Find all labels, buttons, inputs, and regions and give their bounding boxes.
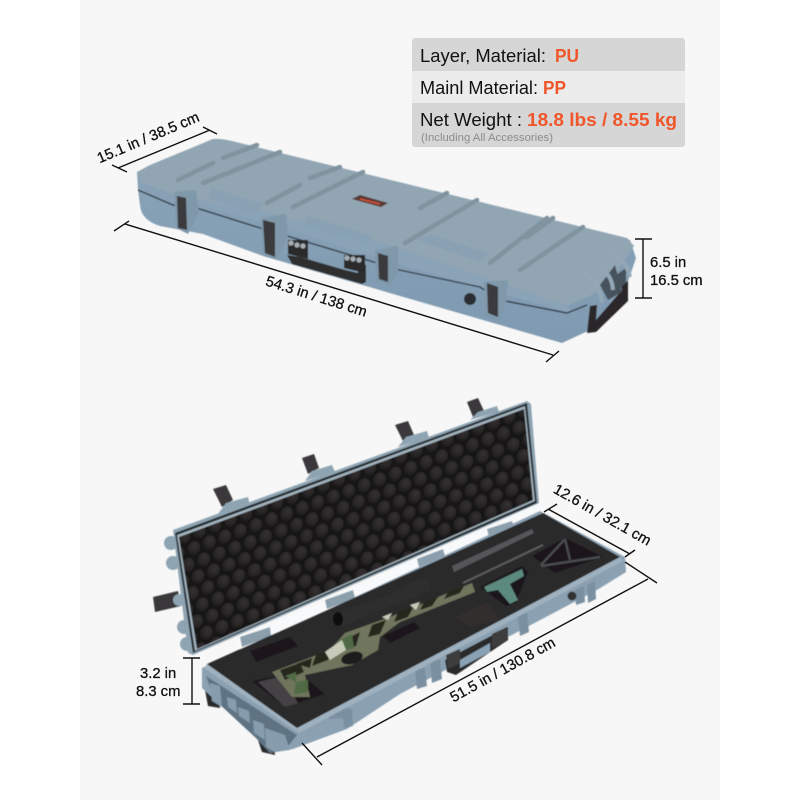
- lid grooves: [178, 145, 583, 270]
- ribs: [210, 683, 290, 752]
- rifle scope: [334, 577, 431, 627]
- handle and knob: [445, 627, 508, 675]
- front handle: [287, 240, 366, 284]
- dimension: case height: 6.5 in: [650, 255, 686, 271]
- dimension: inner depth: [136, 658, 200, 704]
- left side shadow: [206, 676, 297, 753]
- dimension: case height: [635, 239, 703, 298]
- case body: [137, 139, 636, 343]
- dimension: inner depth: 8.3 cm: [136, 684, 180, 700]
- dimension: case length: 54.3 in / 138 cm: [264, 274, 369, 321]
- open base: [202, 505, 626, 755]
- lid latches: [153, 398, 484, 612]
- text: main material: Mainl Material:: [420, 77, 538, 98]
- dimension: inner length: [302, 562, 657, 765]
- text: including accessories: (Including All Accessories): [421, 132, 553, 144]
- dimension: inner length: 51.5 in / 130.8 cm: [448, 635, 558, 706]
- end handle: [587, 281, 628, 333]
- rubber feet: [205, 690, 275, 755]
- rifle stock: camo: [272, 583, 475, 697]
- latch housings: [174, 190, 508, 322]
- text: net weight: Net Weight :: [420, 109, 522, 130]
- panel: material specs: [412, 38, 685, 147]
- foam: egg crate: [179, 409, 533, 649]
- text: PU: PU: [555, 45, 579, 66]
- pistol: [484, 569, 524, 604]
- seam line: [138, 190, 587, 313]
- logo badge: [352, 195, 388, 207]
- lid top face: [137, 139, 634, 306]
- dimension: case height: 16.5 cm: [650, 273, 703, 289]
- background: [80, 0, 720, 800]
- knob: [464, 293, 476, 305]
- bipod: [541, 539, 600, 566]
- latches: [177, 196, 498, 317]
- hinges: [240, 521, 514, 647]
- dimension: inner width: 12.6 in / 32.1 cm: [550, 482, 654, 549]
- pocket highlight: [258, 676, 298, 707]
- text: weight value: 18.8 lbs / 8.55 kg: [527, 109, 677, 130]
- cutout: pockets: [250, 538, 603, 707]
- dimension: case length: [114, 221, 559, 362]
- case foam: [207, 513, 620, 728]
- dimension: inner depth: 3.2 in: [140, 666, 176, 682]
- base rim and side: [202, 511, 626, 753]
- open lid: [153, 398, 539, 655]
- rim highlight: [297, 557, 623, 733]
- lid rim and housings: [164, 401, 539, 655]
- closed case: [137, 139, 636, 343]
- barrel: [452, 529, 534, 572]
- lid inner edge: [175, 403, 537, 653]
- text: PP: PP: [543, 77, 566, 98]
- dimension: case width: 15.1 in / 38.5 cm: [95, 110, 202, 167]
- hinge strip: [236, 505, 545, 650]
- text: layer material: Layer, Material:: [420, 45, 546, 66]
